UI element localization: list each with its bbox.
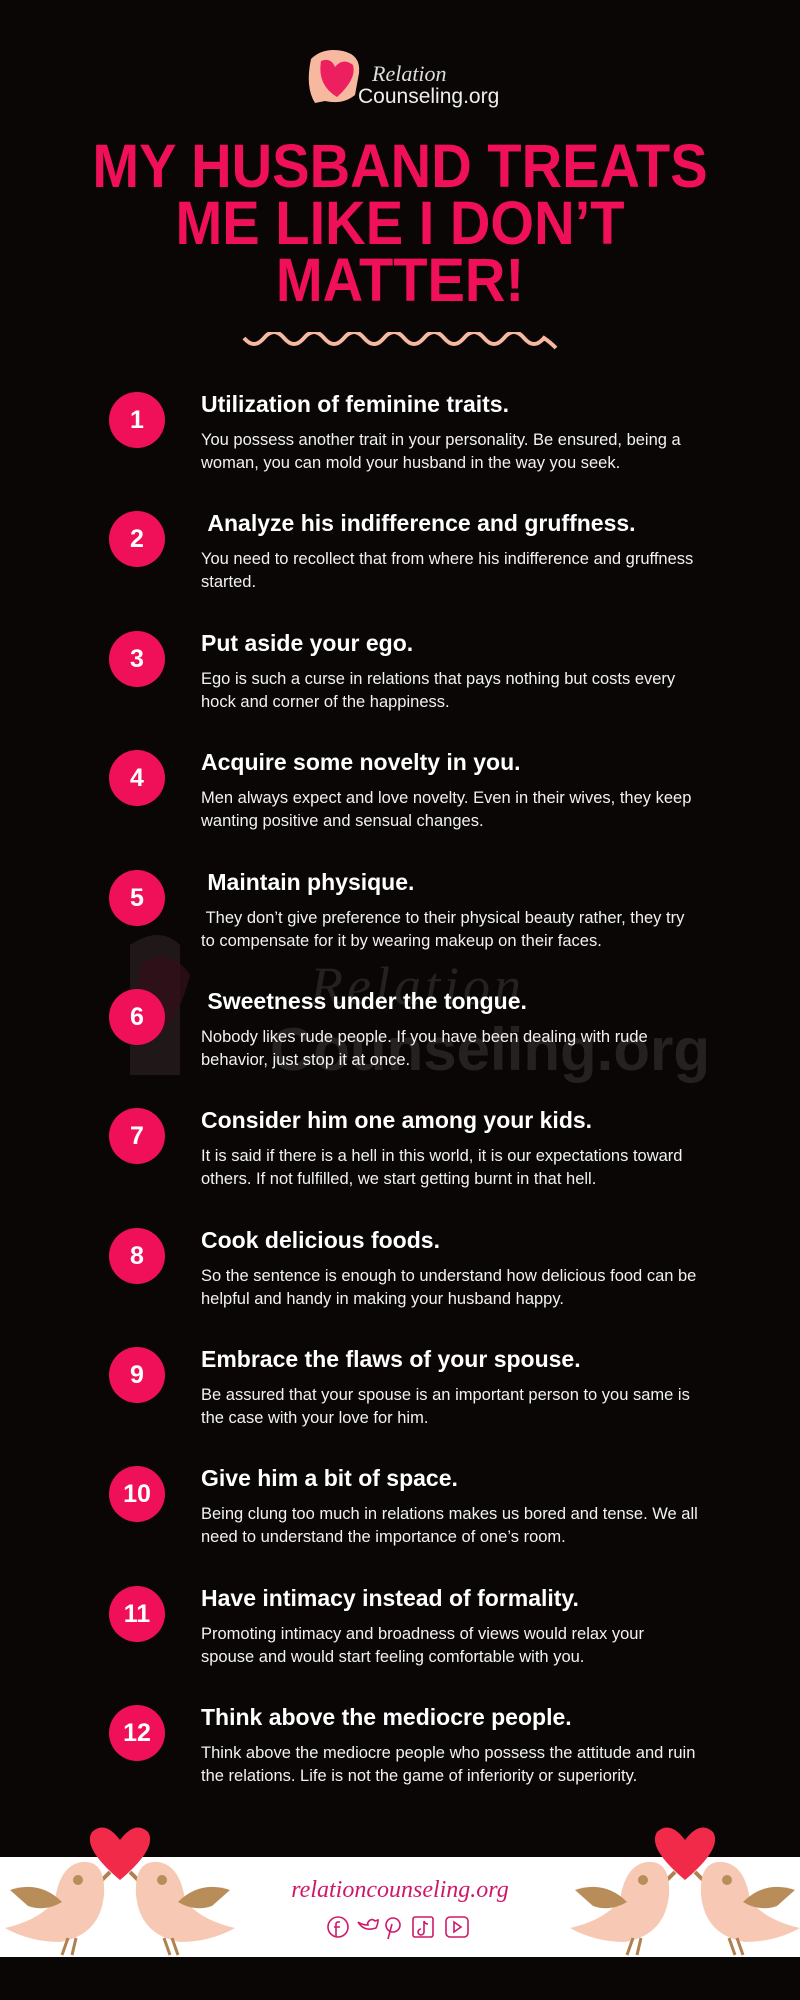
item 10: Being clung too much in relations makes us bored and tense. We all need to understand the importance of one’s room. bbox=[201, 1505, 698, 1546]
item 8 bbox=[109, 1227, 696, 1308]
item 1: You possess another trait in your personality. Be ensured, being a woman, you can mold your husband in the way you seek. bbox=[201, 431, 681, 472]
item 2: You need to recollect that from where his indifference and gruffness started. bbox=[201, 550, 693, 591]
item 5 bbox=[109, 869, 684, 950]
item 4: 4 bbox=[130, 764, 144, 792]
item 7: Consider him one among your kids. bbox=[201, 1107, 592, 1133]
item 9: Be assured that your spouse is an important person to you same is the case with your love for him. bbox=[201, 1386, 690, 1427]
logo: Relation bbox=[372, 61, 447, 86]
item 2: 2 bbox=[130, 525, 144, 553]
logo bbox=[308, 50, 499, 108]
item 4: Acquire some novelty in you. bbox=[201, 749, 521, 775]
watermark: Relation bbox=[310, 956, 525, 1016]
item 6: Sweetness under the tongue. bbox=[207, 988, 527, 1014]
logo: Counseling.org bbox=[358, 85, 499, 108]
title: ME LIKE I DON’T bbox=[176, 189, 624, 257]
item 4: Men always expect and love novelty. Even in their wives, they keep wanting positive and sensual changes. bbox=[201, 789, 691, 830]
item 12: 12 bbox=[123, 1719, 151, 1747]
item 5: They don’t give preference to their physical beauty rather, they try to compensate for it by wearing makeup on their faces. bbox=[201, 909, 684, 950]
item 1: 1 bbox=[130, 406, 144, 434]
wave divider bbox=[242, 332, 558, 350]
item 6 bbox=[109, 988, 648, 1069]
item 11: Have intimacy instead of formality. bbox=[201, 1585, 579, 1611]
item 6: 6 bbox=[130, 1003, 144, 1031]
item 8: So the sentence is enough to understand how delicious food can be helpful and handy in making your husband happy. bbox=[201, 1267, 696, 1308]
item 6: Nobody likes rude people. If you have been dealing with rude behavior, just stop it at once. bbox=[201, 1028, 648, 1069]
item 7: 7 bbox=[130, 1122, 144, 1150]
item 8: 8 bbox=[130, 1242, 144, 1270]
item 3: 3 bbox=[130, 645, 144, 673]
item 10 bbox=[109, 1465, 698, 1546]
item 11 bbox=[109, 1585, 644, 1666]
item 7: It is said if there is a hell in this world, it is our expectations toward others. If not fulfilled, we start getting burnt in that hell. bbox=[201, 1147, 682, 1188]
item 1 bbox=[109, 391, 681, 472]
item 9 bbox=[109, 1346, 690, 1427]
item 7 bbox=[109, 1107, 682, 1188]
item 5: 5 bbox=[130, 884, 144, 912]
icon: fist heart bbox=[308, 50, 360, 103]
item 3 bbox=[109, 630, 676, 711]
item 3: Ego is such a curse in relations that pays nothing but costs every hock and corner of the happiness. bbox=[201, 670, 675, 711]
item 11: 11 bbox=[124, 1600, 150, 1628]
item 3: Put aside your ego. bbox=[201, 630, 413, 656]
watermark bbox=[130, 935, 710, 1083]
item 11: Promoting intimacy and broadness of views would relax your spouse and would start feeling comfortable with you. bbox=[201, 1625, 644, 1666]
item 4 bbox=[109, 749, 691, 830]
item 2 bbox=[109, 510, 693, 591]
item 5: Maintain physique. bbox=[207, 869, 414, 895]
item 10: 10 bbox=[123, 1480, 151, 1508]
item 1: Utilization of feminine traits. bbox=[201, 391, 509, 417]
footer url: relationcounseling.org bbox=[291, 1877, 509, 1903]
item 9: 9 bbox=[130, 1361, 144, 1389]
item 12: Think above the mediocre people. bbox=[201, 1704, 572, 1730]
item 10: Give him a bit of space. bbox=[201, 1465, 458, 1491]
title: MY HUSBAND TREATS bbox=[92, 132, 708, 200]
item 12 bbox=[109, 1704, 695, 1785]
item 12: Think above the mediocre people who possess the attitude and ruin the relations. Life is not the game of inferiority or superiority. bbox=[201, 1744, 695, 1785]
footer birds bbox=[5, 1828, 800, 1956]
item 2: Analyze his indifference and gruffness. bbox=[207, 510, 636, 536]
watermark: Counseling.org bbox=[270, 1016, 710, 1083]
social icons bbox=[327, 1916, 469, 1940]
title: MATTER! bbox=[276, 246, 524, 314]
item 8: Cook delicious foods. bbox=[201, 1227, 440, 1253]
footer band bbox=[0, 1857, 800, 1957]
item 9: Embrace the flaws of your spouse. bbox=[201, 1346, 581, 1372]
title bbox=[92, 132, 708, 314]
